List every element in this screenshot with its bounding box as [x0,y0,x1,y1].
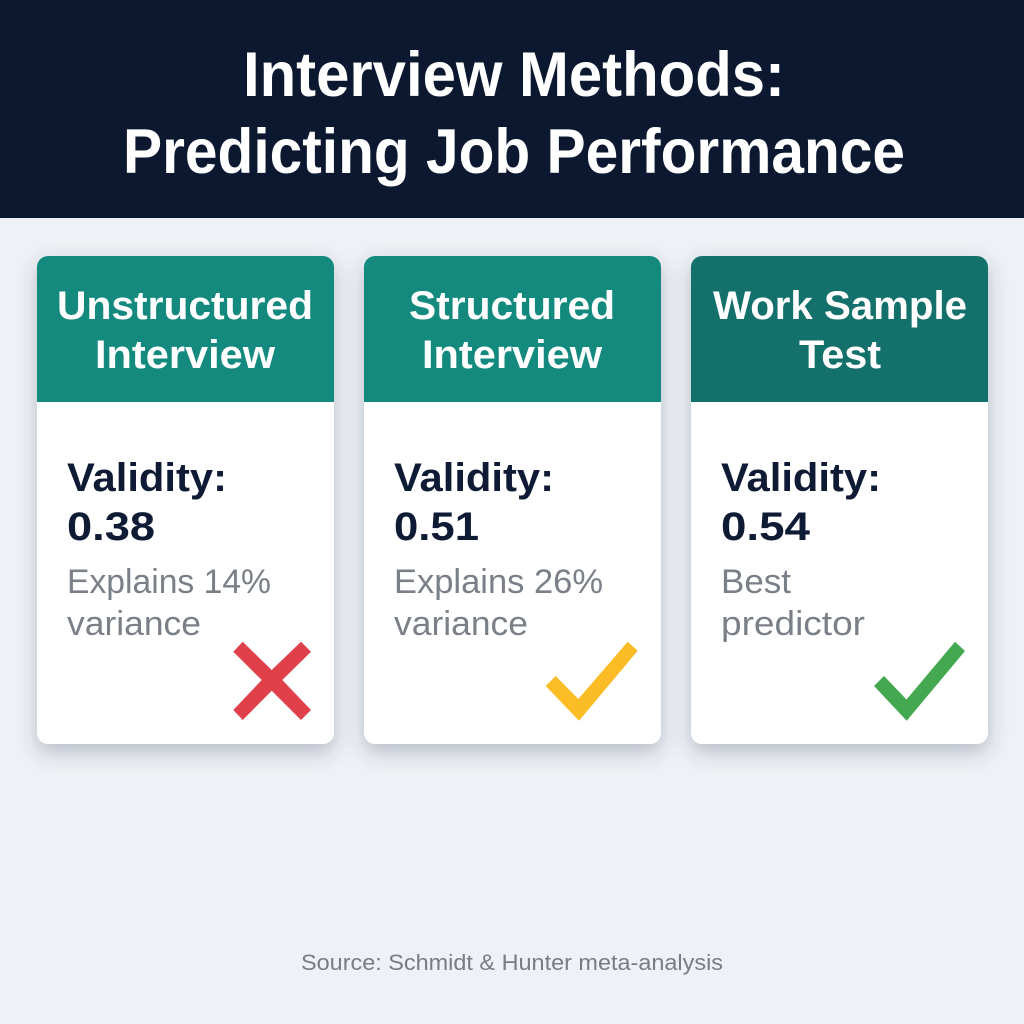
validity score: 0.38: 0.38 [67,505,155,549]
validity score: 0.54 [721,456,881,549]
description: best predictor: Best [721,563,792,601]
description: explains 26% variance: variance [394,605,528,643]
validity score: 0.51: Validity: [394,456,554,500]
description: explains 14% variance: variance [67,605,201,643]
panel: work sample test [691,256,988,744]
validity score: 0.54: Validity: [721,456,881,500]
source note: Source: Schmidt & Hunter meta-analysis [301,950,723,975]
description: best predictor: predictor [721,605,865,643]
icon: yellow check mark [546,642,638,721]
card header: unstructured interview: Interview [95,333,276,377]
description: best predictor [721,563,865,643]
description: explains 26% variance: Explains 26% [394,563,603,601]
card header: structured interview [364,256,661,402]
title banner [0,0,1024,218]
card header: structured interview: Interview [422,333,603,377]
icon: red cross [233,642,311,720]
panel: structured interview [364,256,661,744]
icon: green check mark [874,642,965,721]
panel: unstructured interview [37,256,334,744]
card header: unstructured interview [37,256,334,402]
description: explains 26% variance [394,563,603,643]
validity score: 0.51: 0.51 [394,505,479,549]
validity score: 0.51 [394,456,554,549]
card header: work sample test: Test [799,333,881,377]
card header: unstructured interview: Unstructured [57,284,313,328]
description: explains 14% variance [67,563,271,643]
validity score: 0.54: 0.54 [721,505,811,549]
validity score: 0.38: Validity: [67,456,227,500]
card header: structured interview: Structured [409,284,615,328]
title: Predicting Job Performance [123,117,905,187]
validity score: 0.38 [67,456,227,549]
card header: work sample test: Work Sample [713,284,967,328]
card header: work sample test [691,256,988,402]
title [123,40,905,187]
description: explains 14% variance: Explains 14% [67,563,271,601]
title: Interview Methods: [243,40,785,110]
